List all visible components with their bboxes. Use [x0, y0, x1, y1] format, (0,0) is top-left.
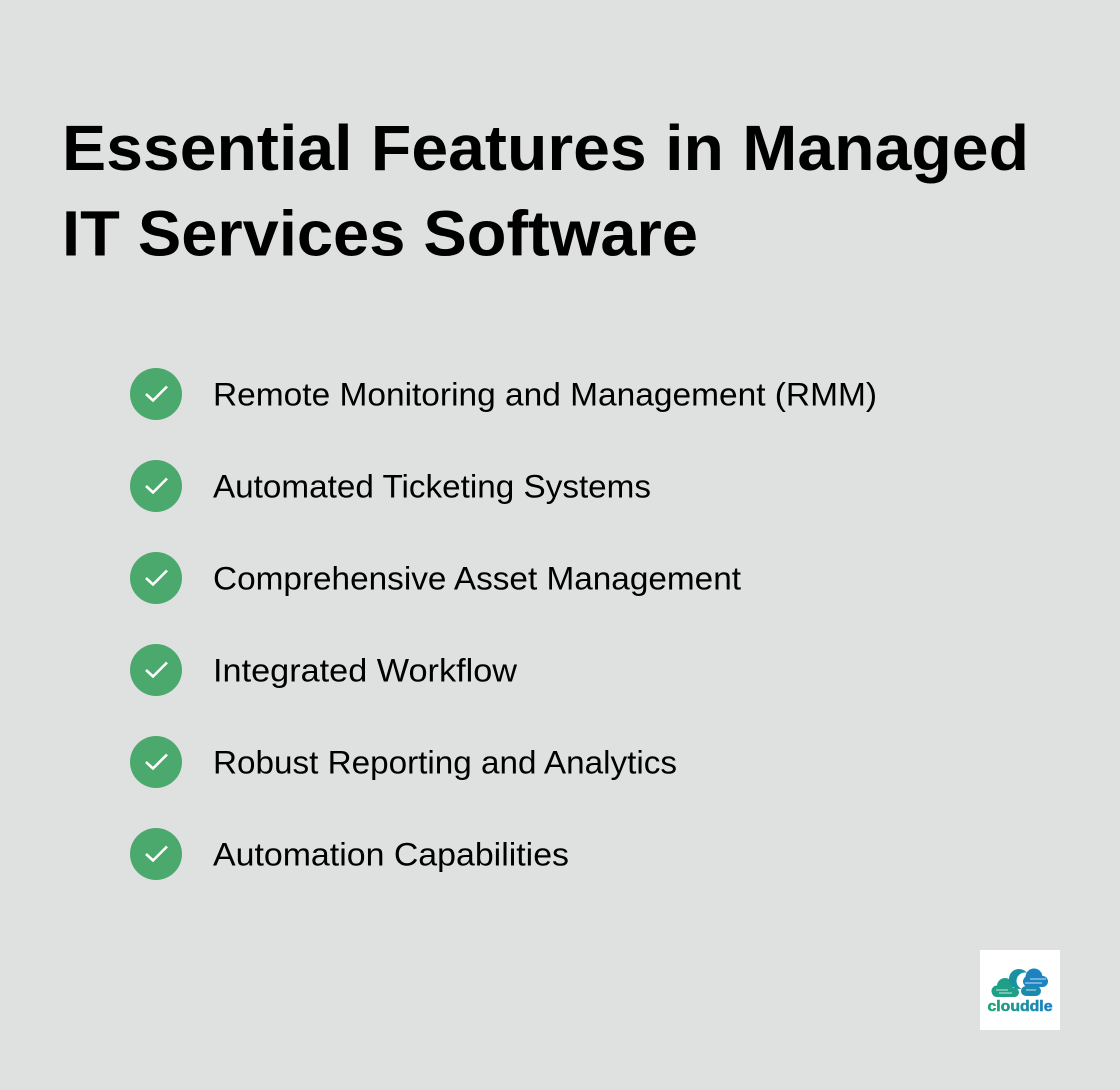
icon: right cloud	[1021, 968, 1048, 996]
list item: Comprehensive Asset Management: Comprehensive Asset Management	[213, 560, 741, 596]
logo wordmark: clouddle	[988, 999, 1052, 1015]
logo: clouddle	[980, 950, 1060, 1030]
title: Essential Features in Managed	[62, 112, 1029, 184]
list item: Integrated Workflow	[130, 644, 518, 696]
list item: Comprehensive Asset Management	[130, 552, 741, 604]
list item: Automation Capabilities: Automation Capabilities	[213, 836, 569, 872]
list item: Automated Ticketing Systems	[130, 460, 651, 512]
list item: Remote Monitoring and Management: Remote Monitoring and Management (RMM)	[213, 376, 877, 412]
list item: Robust Reporting and Analytics	[130, 736, 677, 788]
feature list	[130, 368, 877, 880]
title: IT Services Software	[62, 198, 698, 270]
list item: Robust Reporting and Analytics: Robust Reporting and Analytics	[213, 744, 677, 780]
icon: crescent	[1009, 969, 1034, 990]
list item: Automated Ticketing Systems: Automated Ticketing Systems	[213, 468, 651, 504]
title	[62, 112, 1029, 270]
list item: Integrated Workflow: Integrated Workflow	[213, 652, 518, 688]
list item: Automation Capabilities	[130, 828, 569, 880]
icon: left cloud	[992, 978, 1019, 997]
list item: Remote Monitoring and Management	[130, 368, 877, 420]
